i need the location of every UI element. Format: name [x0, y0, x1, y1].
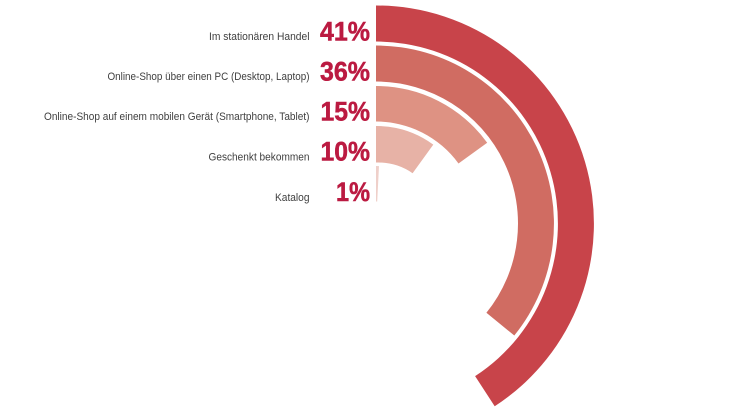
label: Katalog: Katalog: [275, 192, 310, 204]
value: 41%: 41%: [320, 16, 370, 46]
row: Im stationären Handel 41%: [209, 6, 594, 406]
value: 10%: 10%: [320, 136, 370, 166]
label: Online-Shop auf einem mobilen Gerät: Online-Shop auf einem mobilen Gerät (Smartphone, Tablet): [44, 111, 310, 123]
label: Online-Shop über einen PC: Online-Shop über einen PC (Desktop, Laptop): [108, 71, 310, 83]
value: 1%: 1%: [336, 177, 370, 207]
arc: 41%: [376, 6, 594, 406]
row: Katalog 1%: [275, 166, 379, 207]
arc: 10%: [376, 126, 433, 173]
label: Geschenkt bekommen: Geschenkt bekommen: [208, 152, 310, 164]
value: 36%: 36%: [320, 56, 370, 86]
label: Im stationären Handel: Im stationären Handel: [209, 31, 310, 43]
arc: 36%: [376, 46, 554, 336]
row: Online-Shop über einen PC 36%: [108, 46, 554, 336]
value: 15%: 15%: [320, 96, 370, 126]
arc: 15%: [376, 86, 487, 164]
row: Geschenkt bekommen 10%: [208, 126, 433, 173]
arc: 1%: [376, 166, 379, 202]
row: Online-Shop auf einem mobilen Gerät 15%: [44, 86, 487, 164]
